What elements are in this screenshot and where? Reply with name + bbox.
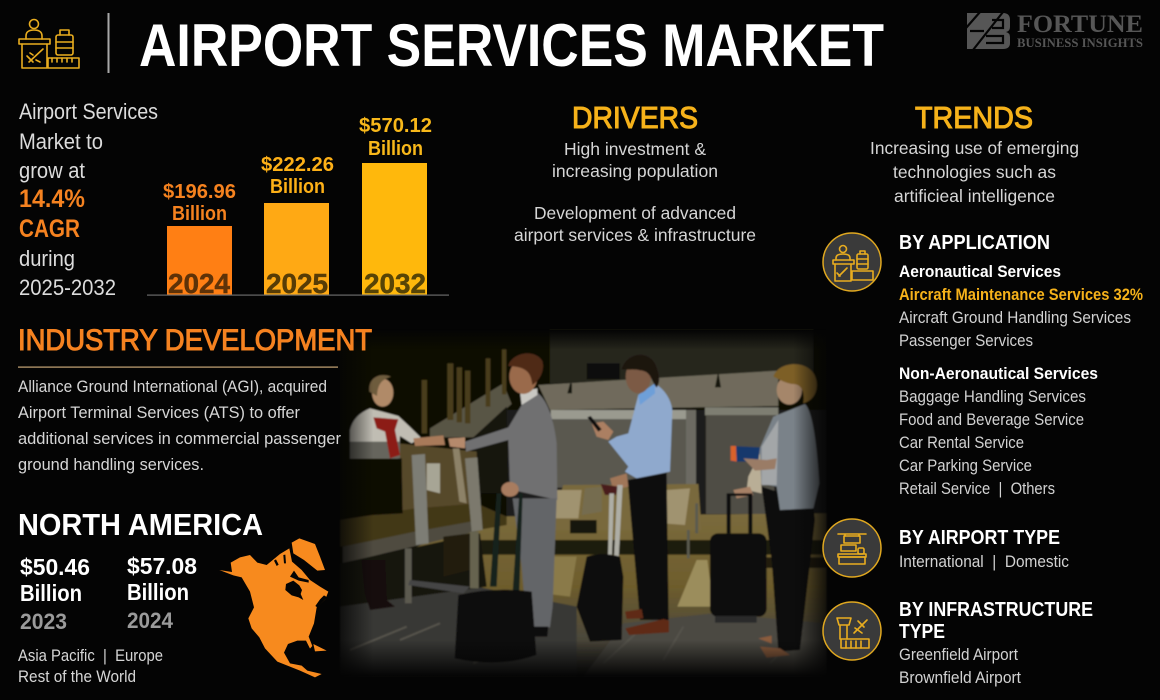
bar 2025: Billion	[270, 175, 325, 198]
drivers panel	[514, 100, 756, 245]
drivers text: airport services & infrastructure	[514, 225, 756, 245]
trends text	[870, 138, 1079, 206]
list: aeronautical services	[899, 263, 1143, 350]
list: airport types: International | Domestic	[899, 553, 1069, 571]
staircase	[430, 383, 512, 437]
industry development text: ground handling services.	[18, 455, 204, 474]
bar 2024: 2024	[168, 268, 230, 299]
2023 value: 2023	[20, 609, 67, 634]
heading: by airport type: BY AIRPORT TYPE	[899, 527, 1060, 549]
CAGR text block: grow at	[19, 158, 85, 183]
heading: by infrastructure type	[899, 599, 1093, 643]
list: aeronautical services: Passenger Services	[899, 332, 1033, 350]
list: infrastructure types	[899, 646, 1021, 687]
drivers heading: DRIVERS	[572, 100, 698, 135]
2024 value: 2024	[127, 608, 174, 633]
CAGR text block	[19, 99, 158, 300]
bar chart: market size	[147, 114, 449, 299]
upper wall right	[550, 330, 813, 383]
CAGR text block: Market to	[19, 129, 103, 154]
list: non-aeronautical services	[899, 365, 1098, 498]
CAGR text block: 2025-2032	[19, 275, 116, 300]
bar 2025	[261, 153, 334, 299]
trends heading: TRENDS	[915, 100, 1033, 135]
industry development panel	[18, 324, 372, 474]
2023 value: $50.46	[20, 554, 90, 580]
photo: passengers at airport check-in counter	[330, 330, 833, 693]
icon: check-in desk	[823, 233, 881, 291]
background lamps	[567, 374, 721, 393]
drivers text: High investment &	[564, 139, 706, 159]
list: infrastructure types: Greenfield Airport	[899, 646, 1018, 664]
trends text: Increasing use of emerging	[870, 138, 1079, 158]
floor	[340, 513, 827, 677]
2023 value	[20, 554, 90, 634]
marble veins	[350, 623, 803, 663]
bar 2025: $222.26	[261, 153, 334, 176]
man in blue shirt	[608, 383, 672, 478]
bar 2024: $196.96	[163, 180, 236, 203]
list: aeronautical services: Aeronautical Services	[899, 263, 1061, 281]
industry development text: Airport Terminal Services (ATS) to offer	[18, 403, 300, 422]
CAGR text block: during	[19, 246, 75, 271]
other regions: Asia Pacific | Europe	[18, 647, 163, 665]
industry development text	[18, 377, 341, 474]
title: AIRPORT SERVICES MARKET	[139, 12, 884, 79]
icon: control tower and plane	[823, 602, 881, 660]
logo: Fortune Business Insights	[966, 11, 1143, 50]
north america heading: NORTH AMERICA	[18, 507, 263, 542]
bar 2032: Billion	[368, 137, 423, 160]
industry development heading: INDUSTRY DEVELOPMENT	[18, 324, 372, 357]
list: aeronautical services: Aircraft Ground Handling Services	[899, 309, 1131, 327]
bar 2024: Billion	[172, 202, 227, 225]
woman with passport	[762, 487, 815, 652]
CAGR text block: 14.4%	[19, 185, 85, 213]
icon: airport desk	[823, 519, 881, 577]
2023 value: Billion	[20, 580, 82, 606]
north america panel	[18, 507, 328, 686]
map: North America	[219, 538, 328, 677]
trends text: technologies such as	[893, 162, 1056, 182]
list: non-aeronautical services: Food and Beverage Service	[899, 411, 1084, 429]
2024 value	[127, 553, 197, 633]
bar 2032: 2032	[364, 268, 426, 299]
bar 2024	[163, 180, 236, 299]
other regions: Rest of the World	[18, 668, 136, 686]
man in grey suit	[448, 437, 465, 448]
industry development text: additional services in commercial passenger	[18, 429, 341, 448]
seating	[550, 484, 702, 530]
other regions	[18, 647, 163, 686]
list: non-aeronautical services: Baggage Handling Services	[899, 388, 1086, 406]
list: non-aeronautical services: Car Parking Service	[899, 457, 1032, 475]
list: non-aeronautical services: Retail Service | Others	[899, 480, 1055, 498]
list: non-aeronautical services: Non-Aeronautical Services	[899, 365, 1098, 383]
2024 value: $57.08	[127, 553, 197, 579]
logo: Fortune Business Insights: FORTUNE	[1017, 11, 1143, 38]
drivers text: Development of advanced	[534, 203, 736, 223]
CAGR text block: CAGR	[19, 215, 80, 243]
2024 value: Billion	[127, 579, 189, 605]
header divider	[108, 13, 110, 73]
heading: by application: BY APPLICATION	[899, 232, 1050, 254]
trends panel	[870, 100, 1079, 206]
segment: by application	[823, 232, 1143, 498]
counter with glass	[398, 443, 478, 517]
segment: by infrastructure type	[823, 599, 1093, 687]
segment: by airport type	[823, 519, 1069, 577]
bar 2032: $570.12	[359, 114, 432, 137]
header icon: check-in desk and luggage	[19, 20, 79, 68]
CAGR text block: Airport Services	[19, 99, 158, 124]
trends text: artificieal intelligence	[894, 186, 1055, 206]
list: infrastructure types: Brownfield Airport	[899, 669, 1021, 687]
heading: by infrastructure type: BY INFRASTRUCTURE	[899, 599, 1093, 621]
heading: by infrastructure type: TYPE	[899, 621, 945, 643]
receptionist	[362, 560, 395, 610]
drivers text	[514, 139, 756, 245]
industry development text: Alliance Ground International (AGI), acquired	[18, 377, 327, 396]
bar 2025: 2025	[266, 268, 328, 299]
logo: Fortune Business Insights: BUSINESS INSIGHTS	[1017, 35, 1143, 50]
list: non-aeronautical services: Car Rental Service	[899, 434, 1024, 452]
drivers text: increasing population	[552, 161, 718, 181]
bar 2032	[359, 114, 432, 299]
